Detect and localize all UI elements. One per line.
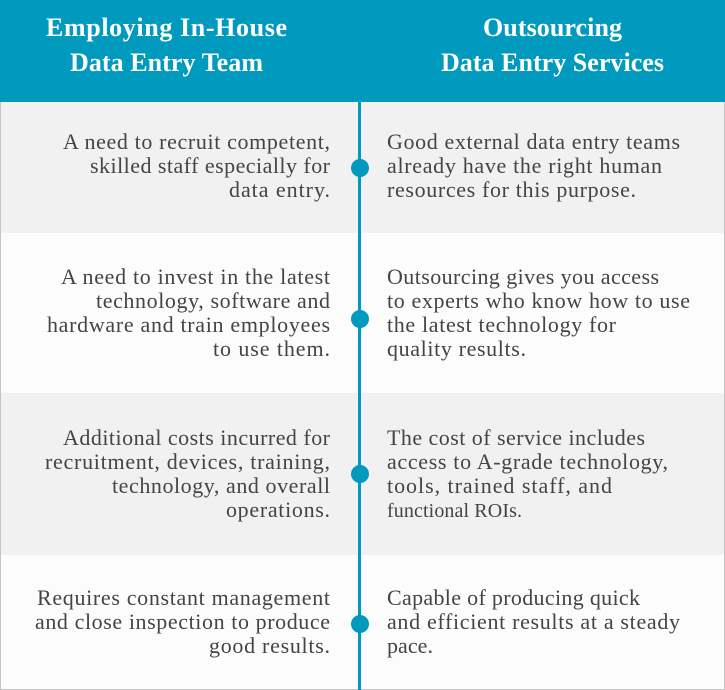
text: in-house recruitment: skilled staff especially for (90, 153, 331, 178)
text: in-house management: Requires constant management (37, 585, 330, 610)
text: outsourcing technology: to experts who know how to use (387, 288, 690, 313)
heading: outsourcing column: Outsourcing (483, 13, 622, 42)
heading: in-house column: Data Entry Team (70, 48, 263, 77)
text: outsourcing technology: Outsourcing gives you access (387, 264, 659, 289)
text: outsourcing human resources: Good external data entry teams (387, 129, 680, 154)
icon: timeline dot 2 (351, 310, 369, 328)
text: outsourcing human resources: resources for this purpose. (387, 177, 636, 202)
text: outsourcing technology (387, 264, 690, 361)
text: outsourcing costs: functional ROIs. (387, 500, 522, 522)
timeline: vertical line (358, 102, 361, 690)
text: outsourcing costs (387, 425, 668, 522)
text: outsourcing technology: quality results. (387, 336, 526, 361)
text: in-house costs: Additional costs incurred for (63, 425, 331, 450)
text: in-house technology: technology, software and (96, 288, 330, 313)
text: outsourcing results: Capable of producing quick (387, 585, 640, 610)
panel: row 4 background (1, 555, 724, 689)
heading: outsourcing column: Data Entry Services (441, 48, 664, 77)
text: in-house technology: hardware and train employees (47, 312, 330, 337)
icon: timeline dot 4 (351, 615, 369, 633)
text: in-house technology: to use them. (213, 336, 330, 361)
text: outsourcing costs: access to A-grade technology, (387, 449, 668, 474)
heading: in-house column (46, 13, 287, 77)
text: in-house technology: A need to invest in the latest (61, 264, 330, 289)
text: in-house recruitment: A need to recruit competent, (63, 129, 330, 154)
text: in-house costs: operations. (226, 497, 330, 522)
text: in-house costs (45, 425, 331, 522)
icon: timeline dot 3 (351, 465, 369, 483)
text: outsourcing human resources (387, 129, 680, 202)
icon: timeline dot 1 (351, 159, 369, 177)
text: in-house management: and close inspection to produce (35, 609, 330, 634)
text: outsourcing human resources: already have the right human (387, 153, 662, 178)
heading: in-house column: Employing In-House (46, 13, 287, 42)
text: in-house costs: recruitment, devices, training, (45, 449, 330, 474)
panel: row 2 background (1, 233, 724, 393)
panel: header band (0, 0, 725, 102)
panel: row 1 background (1, 102, 724, 233)
text: in-house costs: technology, and overall (112, 473, 330, 498)
text: outsourcing results: pace. (387, 633, 433, 658)
text: in-house recruitment (63, 129, 331, 202)
heading: outsourcing column (441, 13, 664, 77)
text: outsourcing technology: the latest technology for (387, 312, 617, 337)
text: in-house technology (47, 264, 330, 361)
text: in-house management (35, 585, 330, 658)
text: outsourcing results: and efficient results at a steady (387, 609, 680, 634)
text: in-house recruitment: data entry. (229, 177, 330, 202)
text: in-house management: good results. (209, 633, 330, 658)
text: outsourcing results (387, 585, 680, 658)
text: outsourcing costs: The cost of service includes (387, 425, 645, 450)
panel: row 3 background (1, 393, 724, 555)
text: outsourcing costs: tools, trained staff, and (387, 473, 612, 498)
